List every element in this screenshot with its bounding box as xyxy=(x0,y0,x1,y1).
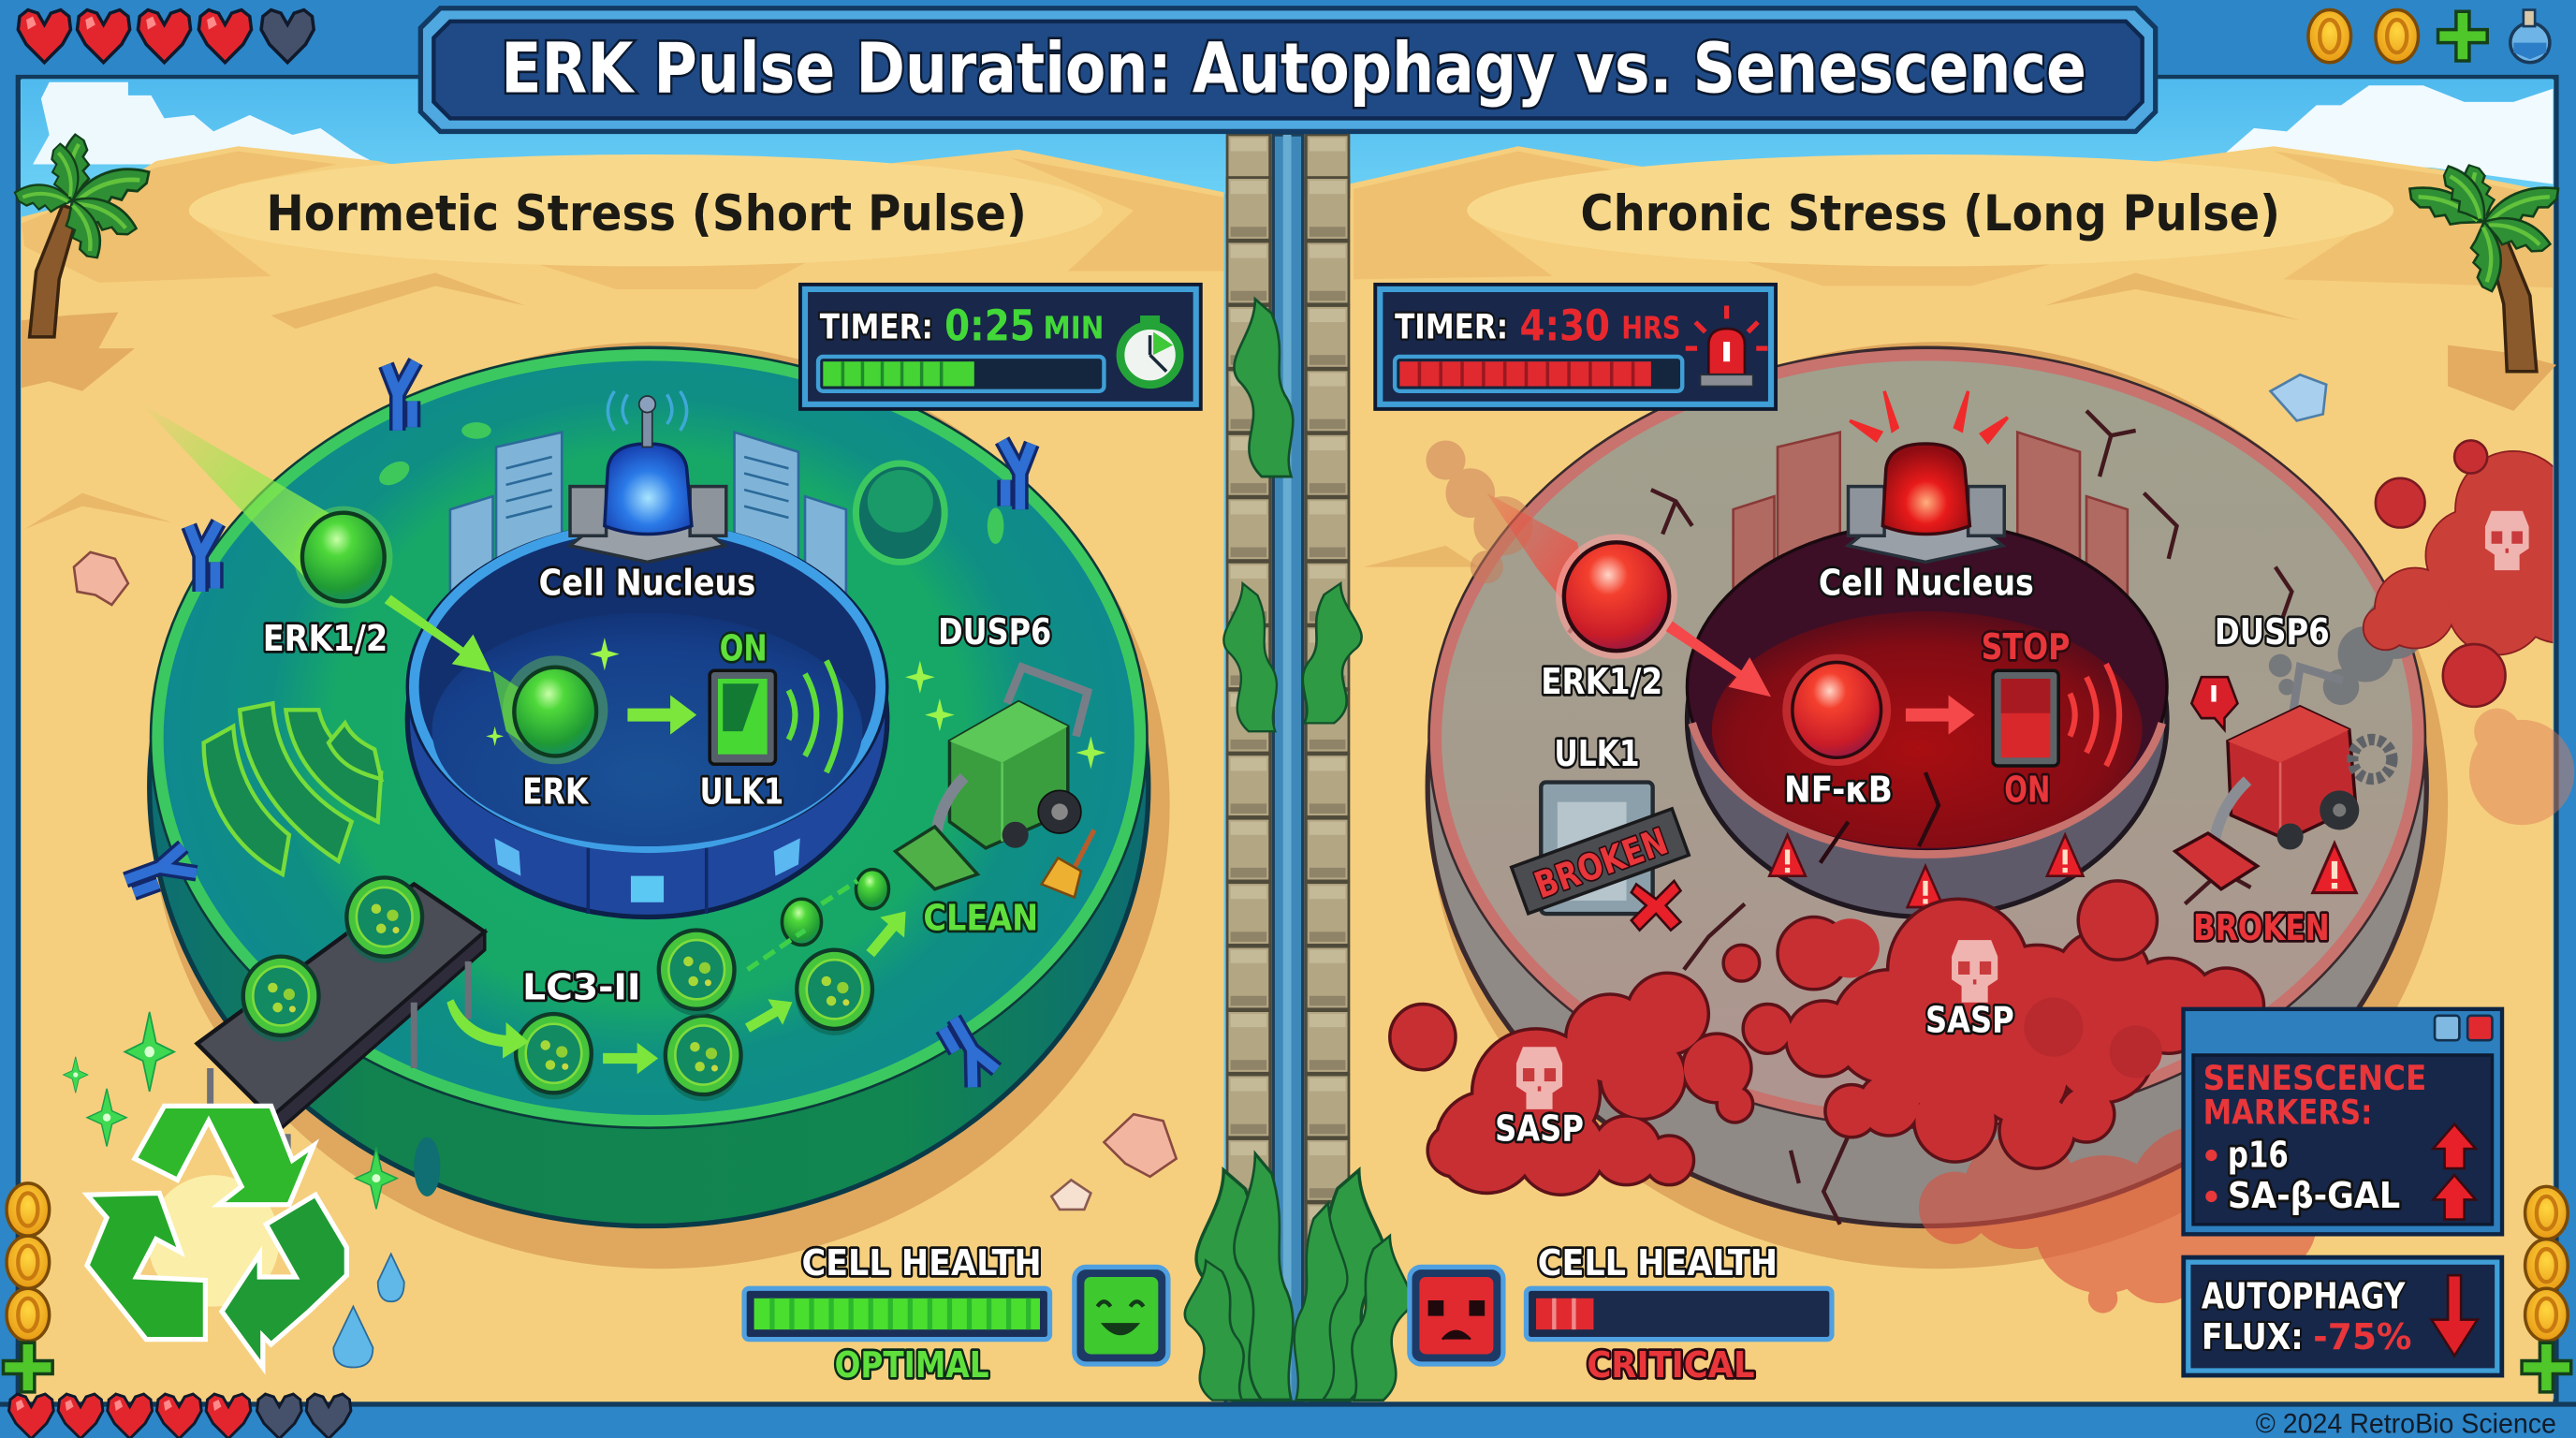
label ULK1 right: ULK1 xyxy=(1554,733,1640,775)
label Cell Nucleus left: Cell Nucleus xyxy=(539,562,755,604)
senescence markers window: MARKERS: xyxy=(2203,1093,2372,1133)
label STOP: STOP xyxy=(1982,626,2070,668)
autophagy flux panel xyxy=(2184,1257,2502,1375)
label DUSP6 right: DUSP6 xyxy=(2215,611,2330,653)
label ERK1/2 right: ERK1/2 xyxy=(1541,661,1662,703)
arrow from ERK1/2 to nucleus xyxy=(385,594,491,672)
palm tree left xyxy=(14,133,152,337)
label BROKEN red: BROKEN xyxy=(2193,907,2330,949)
broken vacuum xyxy=(2175,668,2392,893)
senescence markers window xyxy=(2184,1009,2502,1234)
timer panel left: TIMER: xyxy=(820,307,933,347)
stain on sand xyxy=(1919,1125,2317,1313)
timer panel right xyxy=(1375,285,1776,409)
arrow from ERK1/2 to NF-kB xyxy=(1666,622,1771,697)
timer panel right: TIMER: xyxy=(1395,307,1508,347)
label SASP left: SASP xyxy=(1495,1108,1584,1150)
alarm beacon red xyxy=(1848,391,2008,562)
ERK sphere in nucleus xyxy=(486,638,620,764)
label CLEAN: CLEAN xyxy=(923,898,1038,940)
arrow ERK to ULK1 xyxy=(627,696,696,735)
SASP cloud right edge xyxy=(2364,440,2576,707)
arrow NF-kB to switch xyxy=(1906,696,1975,735)
senescence markers window: p16 xyxy=(2228,1134,2289,1176)
timer panel right: HRS xyxy=(1621,310,1680,346)
NF-kB sphere xyxy=(1782,654,1891,766)
cell nucleus damaged xyxy=(1687,522,2167,917)
bottom status bar xyxy=(0,1401,2576,1438)
label DUSP6 left: DUSP6 xyxy=(938,611,1051,653)
label Cell Nucleus right: Cell Nucleus xyxy=(1819,562,2034,604)
cracks on cell xyxy=(1569,411,2291,1225)
senescence markers window: SA-β-GAL xyxy=(2228,1175,2400,1217)
panel title xyxy=(420,8,2156,131)
panel title: ERK Pulse Duration: Autophagy vs. Senescence xyxy=(501,29,2086,109)
health bar right: CRITICAL xyxy=(1587,1344,1754,1387)
heading left: Hormetic Stress (Short Pulse) xyxy=(266,185,1027,242)
palm tree right xyxy=(2405,163,2563,372)
docked vesicle xyxy=(856,463,944,562)
label LC3-II: LC3-II xyxy=(522,966,640,1008)
autophagosome vesicles xyxy=(242,870,889,1101)
ULK1 switch on xyxy=(710,661,841,772)
label ULK1: ULK1 xyxy=(700,770,783,813)
hearts bottom left xyxy=(8,1394,351,1438)
health bar left: OPTIMAL xyxy=(835,1344,989,1387)
flow arrows along vesicle path xyxy=(446,881,918,1074)
SASP cloud center xyxy=(1723,881,2262,1167)
timer panel right: 4:30 xyxy=(1519,301,1610,350)
face smile xyxy=(1075,1267,1168,1364)
recycle icon xyxy=(87,1106,346,1368)
timer panel left xyxy=(800,285,1201,409)
label SASP center: SASP xyxy=(1925,999,2014,1041)
timer panel left: MIN xyxy=(1043,310,1104,346)
sparkles and water drops xyxy=(64,1012,404,1368)
chronic cell: cracked membrane and base xyxy=(1427,342,2448,1269)
label ERK: ERK xyxy=(522,770,590,813)
broken ULK1 switch: BROKEN xyxy=(1530,821,1674,907)
label ERK1/2 left: ERK1/2 xyxy=(263,618,388,660)
center dividing stone wall with water channel xyxy=(1227,135,1349,1401)
cell nucleus healthy xyxy=(407,522,887,917)
health bar right: CELL HEALTH xyxy=(1538,1242,1778,1284)
health bar right xyxy=(1526,1242,1832,1387)
endoplasmic reticulum folds xyxy=(204,703,381,874)
broom xyxy=(1042,829,1094,897)
SASP cloud left xyxy=(1390,975,1751,1193)
hearts top left xyxy=(18,10,314,63)
autophagy flux panel: AUTOPHAGY xyxy=(2202,1275,2406,1317)
side coins left xyxy=(4,1183,52,1392)
autophagy flux panel: FLUX: xyxy=(2202,1316,2304,1358)
health bar left xyxy=(744,1242,1050,1387)
label NF-kB: NF-κB xyxy=(1784,770,1893,812)
face frown xyxy=(1410,1267,1503,1364)
label ON red: ON xyxy=(2004,770,2050,812)
membrane receptors xyxy=(122,361,1032,1087)
autophagy flux panel: -75% xyxy=(2313,1316,2411,1358)
light stain on right sand xyxy=(2469,709,2574,825)
document panels left nucleus xyxy=(450,433,846,624)
heading right: Chronic Stress (Long Pulse) xyxy=(1580,185,2280,242)
timer panel left: 0:25 xyxy=(944,301,1035,350)
skull right edge xyxy=(2485,511,2529,570)
ERK1/2 red sphere with trail xyxy=(1426,440,1677,659)
healthy cell: outer membrane and base xyxy=(150,342,1170,1269)
seaweed along the wall xyxy=(1185,299,1411,1401)
skull left xyxy=(1516,1047,1562,1109)
ERK1/2 sphere with green trail xyxy=(139,403,392,609)
alarm beacon blue xyxy=(570,391,726,562)
senescence markers window: SENESCENCE xyxy=(2203,1058,2426,1098)
sea shells xyxy=(74,374,2326,1210)
document panels right nucleus xyxy=(1734,433,2128,624)
skull center xyxy=(1952,940,1998,1003)
top right inventory icons xyxy=(2308,10,2550,63)
red switch xyxy=(1993,664,2119,766)
DUSP6 vacuum cleaner xyxy=(896,661,1105,889)
broken ULK1 switch xyxy=(1512,783,1689,931)
smoke xyxy=(2269,583,2430,705)
health bar left: CELL HEALTH xyxy=(801,1242,1042,1284)
conveyor belt xyxy=(198,884,485,1167)
side coins right xyxy=(2522,1186,2571,1392)
label ON: ON xyxy=(720,628,768,670)
